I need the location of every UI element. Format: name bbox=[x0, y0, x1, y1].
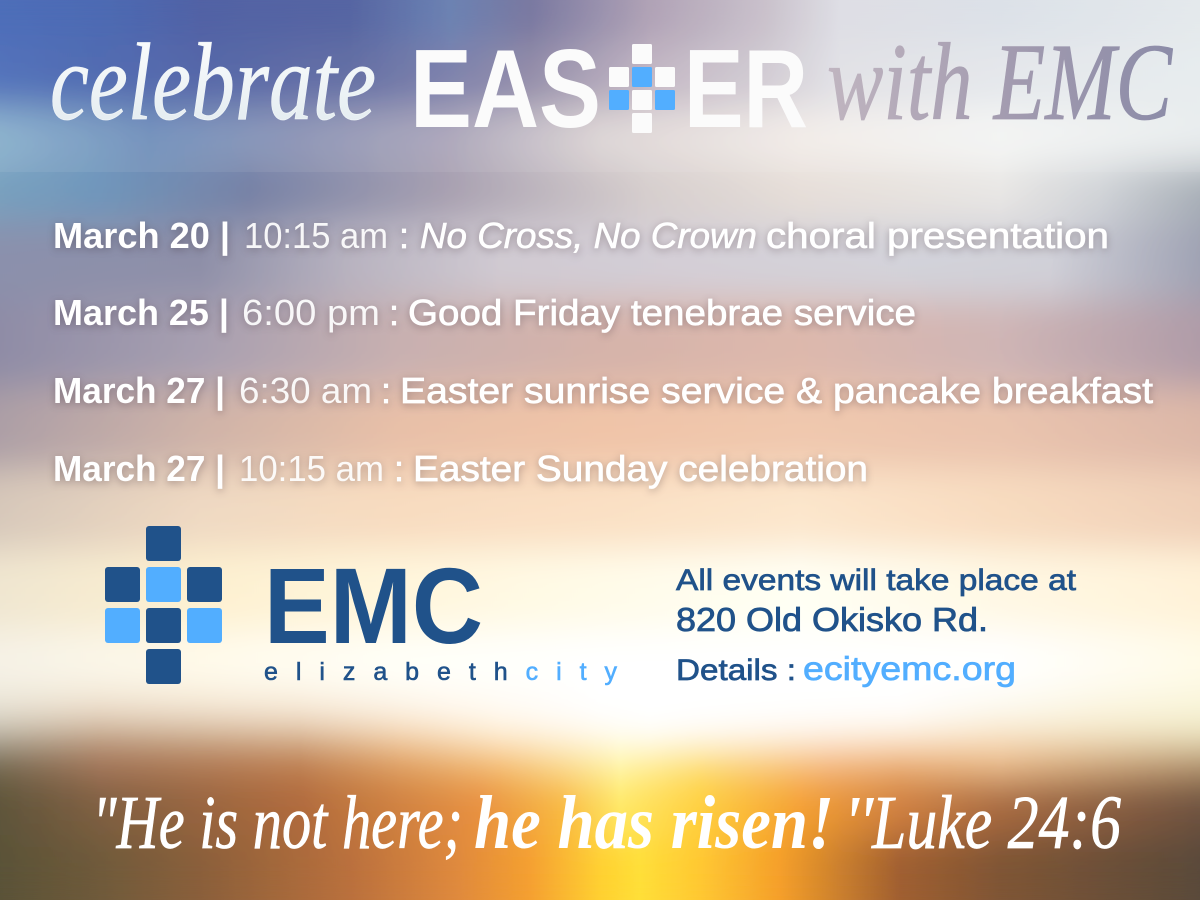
address: 820 Old Okisko Rd. bbox=[676, 601, 988, 638]
icon: cross replacing the T in Easter bbox=[609, 44, 675, 133]
event: March 20 bbox=[53, 215, 1109, 257]
quote first part: "He is not here; bbox=[92, 781, 463, 865]
event: March 27 sunrise: 6:30 am bbox=[239, 370, 372, 411]
event: March 27 celebration: Easter Sunday celebration bbox=[413, 448, 868, 489]
website: ecityemc.org bbox=[803, 650, 1016, 687]
logo wordmark: EMC bbox=[264, 545, 483, 666]
closing quote mark: " bbox=[842, 781, 875, 865]
event: March 25: March 25 | bbox=[53, 292, 229, 334]
event: March 27 sunrise: March 27 | bbox=[53, 370, 225, 412]
citation: Luke 24:6 bbox=[871, 781, 1121, 865]
event: March 25 bbox=[53, 292, 916, 334]
title: EASTER letters before the cross: EAS bbox=[410, 27, 601, 151]
event: March 27 celebration: 10:15 am bbox=[239, 448, 384, 489]
title: EASTER letters after the cross: ER bbox=[684, 27, 808, 151]
event: March 27 celebration: March 27 | bbox=[53, 448, 225, 490]
event: March 27 sunrise bbox=[53, 370, 1153, 412]
event: March 25: Good Friday tenebrae service bbox=[408, 292, 916, 333]
EMC logo bbox=[105, 526, 618, 686]
event: March 27 sunrise: : bbox=[381, 370, 391, 411]
event: March 27 sunrise: Easter sunrise service & pancake breakfast bbox=[400, 370, 1153, 411]
scripture quote bbox=[92, 781, 1121, 865]
details label: Details : bbox=[676, 654, 796, 687]
event: March 20: : bbox=[399, 215, 409, 256]
location intro: All events will take place at bbox=[676, 564, 1077, 597]
event: March 20: No Cross, No Crown bbox=[420, 215, 757, 256]
event: March 20: 10:15 am bbox=[244, 215, 388, 256]
event: March 27 celebration bbox=[53, 448, 868, 490]
title: celebrate: celebrate bbox=[50, 21, 376, 143]
event: March 25: : bbox=[389, 292, 399, 333]
icon: EMC cross bbox=[105, 526, 222, 684]
event: March 20: March 20 | bbox=[53, 215, 230, 257]
event schedule bbox=[53, 215, 1153, 490]
event: March 27 celebration: : bbox=[394, 448, 404, 489]
event: March 25: 6:00 pm bbox=[242, 292, 380, 333]
quote emphasis: he has risen! bbox=[474, 781, 834, 865]
logo location: elizabeth city: elizabeth city bbox=[264, 658, 618, 686]
title bbox=[50, 21, 1173, 151]
location and details bbox=[676, 564, 1077, 687]
event: March 20: choral presentation bbox=[766, 215, 1109, 256]
